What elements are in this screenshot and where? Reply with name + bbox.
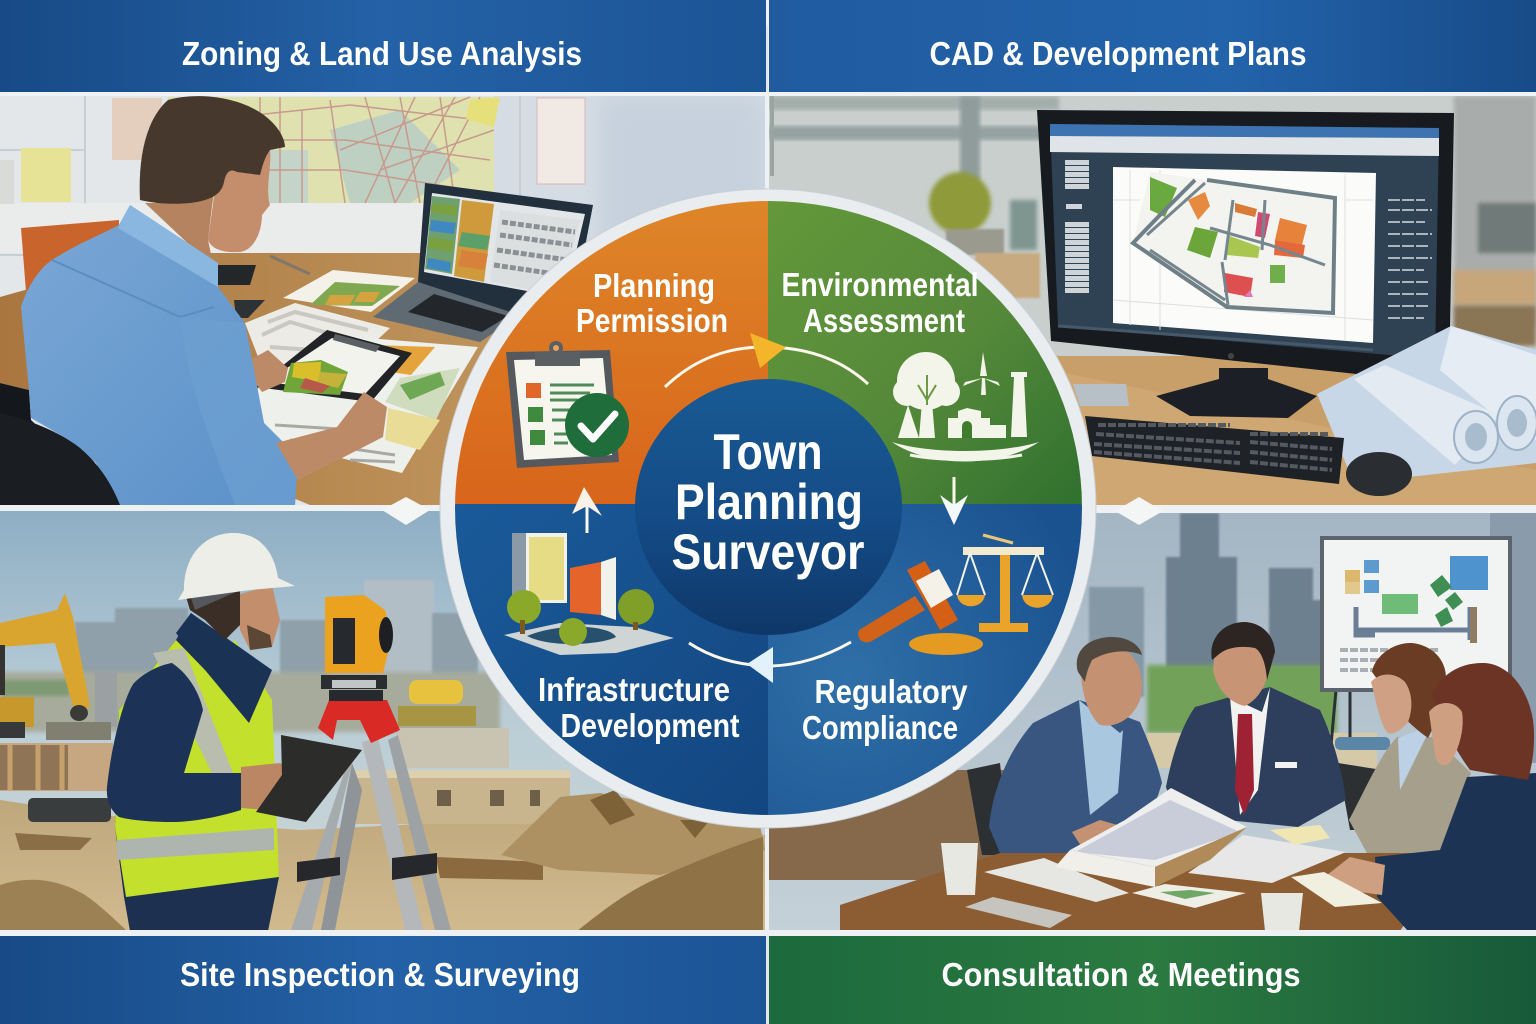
- blurred skyline: [1089, 513, 1328, 697]
- orange folder: [21, 220, 119, 292]
- monitor: [1037, 110, 1454, 384]
- woman foreground: [1327, 663, 1536, 931]
- wooden wall: [769, 770, 1009, 880]
- central hub: Planning: [675, 474, 863, 530]
- meeting table: [840, 853, 1440, 931]
- heading: CAD and development plans: [769, 0, 1536, 92]
- arrow: bottom: [689, 642, 851, 683]
- surveyor: [107, 533, 362, 931]
- plans on desk: [245, 270, 478, 473]
- arrow: top: [665, 333, 868, 387]
- dirt mounds: [0, 790, 765, 931]
- label: regulatory compliance: Regulatory: [814, 673, 968, 710]
- label: regulatory compliance: Compliance: [802, 709, 958, 746]
- keyboard: [1085, 416, 1344, 484]
- mouse: [1346, 452, 1412, 496]
- monitor stand: [1156, 368, 1317, 418]
- woman right: [1349, 643, 1471, 855]
- colour quadrants: [450, 195, 1088, 819]
- whiteboard: [1322, 538, 1510, 750]
- blurred plant: [929, 172, 1037, 255]
- coffee cups and phone: [941, 843, 1303, 931]
- wall map: [168, 97, 500, 203]
- man at desk: [0, 96, 387, 505]
- parked car: [28, 798, 111, 822]
- heading: site inspection and surveying: Site Inspection & Surveying: [180, 956, 580, 993]
- blurred skyline: [75, 580, 478, 683]
- heading: consultation and meetings: Consultation & Meetings: [942, 956, 1300, 993]
- panel: site inspection and surveying photo scene: [0, 511, 765, 931]
- label: environmental assessment: [782, 266, 978, 339]
- arrow: left: [572, 487, 602, 533]
- label: infrastructure development: Development: [560, 707, 740, 744]
- panel: zoning and land use photo scene: [0, 96, 765, 505]
- diamond connector left: [382, 497, 430, 525]
- panel: CAD and development plans photo scene: [769, 96, 1536, 505]
- central circular diagram: [440, 189, 1096, 828]
- icon: tree, wind turbine and factory: [892, 352, 1039, 462]
- man left: [989, 637, 1162, 860]
- label: environmental assessment: Environmental: [782, 266, 978, 303]
- man centre: [1166, 622, 1346, 827]
- small box: [1073, 384, 1129, 406]
- label: planning permission: [576, 267, 728, 339]
- label: regulatory compliance: [802, 673, 968, 746]
- site plan: [1133, 172, 1335, 313]
- documents on table: [984, 788, 1382, 908]
- phones on desk: [218, 256, 310, 318]
- label: environmental assessment: Assessment: [803, 302, 965, 339]
- background buildings: [0, 680, 509, 791]
- chairs: [967, 763, 1382, 855]
- heading: site inspection and surveying: [0, 936, 766, 1024]
- arrow: right: [940, 477, 968, 525]
- blueprint rolls: [1317, 326, 1536, 483]
- low building: [356, 770, 570, 824]
- heading: zoning and land use analysis: [0, 0, 766, 92]
- window sill: [1147, 733, 1377, 768]
- excavator: [0, 593, 90, 738]
- icon: clipboard checklist: [506, 341, 629, 468]
- icon: gavel and scales of justice: [858, 535, 1053, 655]
- panel: consultation and meetings photo scene: [769, 513, 1536, 931]
- label: infrastructure development: Infrastructure: [538, 671, 730, 708]
- laptop: [373, 183, 593, 342]
- label: infrastructure development: [538, 671, 740, 744]
- desk: [0, 253, 494, 505]
- label: planning permission: Permission: [576, 302, 728, 339]
- clipboard with plans: [256, 330, 412, 402]
- icon: buildings and landscape: [504, 533, 674, 655]
- central hub: Town: [714, 424, 822, 480]
- ground: [0, 800, 765, 931]
- central hub: Surveyor: [672, 524, 864, 580]
- heading: consultation and meetings: [769, 936, 1536, 1024]
- tripod and total station: [291, 595, 451, 930]
- heading: CAD and development plans: CAD & Development Plans: [930, 35, 1306, 72]
- central hub: [635, 379, 902, 635]
- heading: zoning and land use analysis: Zoning & Land Use Analysis: [182, 35, 582, 72]
- label: planning permission: Planning: [593, 267, 715, 304]
- diamond connector right: [1115, 497, 1163, 525]
- desk: [1040, 352, 1536, 505]
